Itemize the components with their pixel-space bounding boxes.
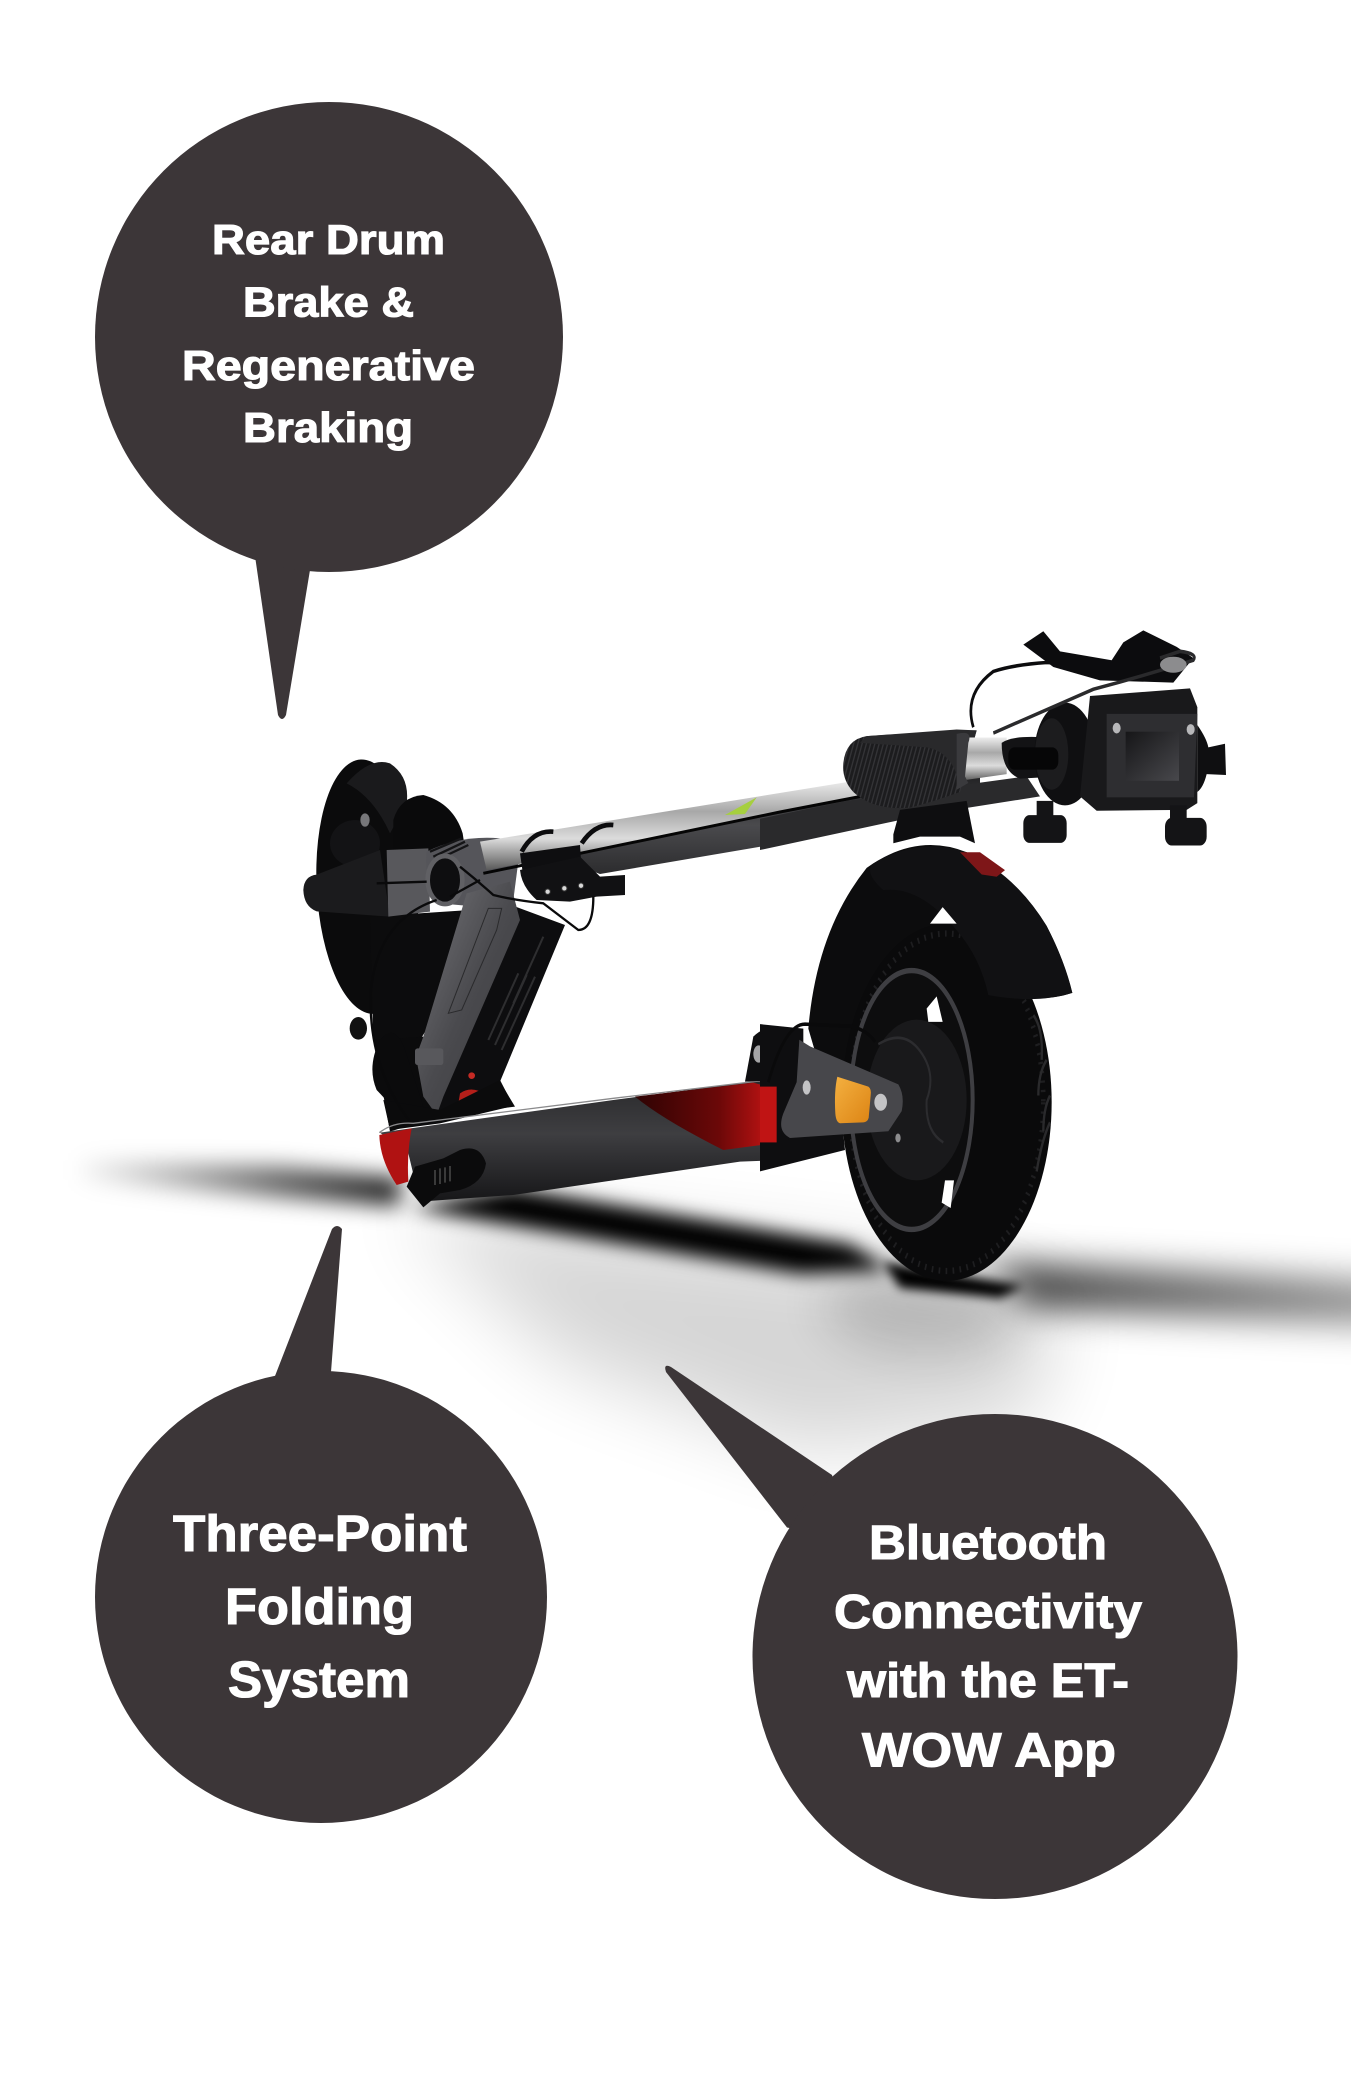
neck grey panel bbox=[416, 882, 520, 1115]
black foot bbox=[383, 1080, 513, 1130]
callout text bbox=[173, 1505, 467, 1708]
chrome cable bbox=[993, 651, 1194, 733]
callout text: with the ET- bbox=[846, 1655, 1129, 1708]
callout: rear drum brake bbox=[95, 102, 563, 719]
neck black side bbox=[423, 903, 565, 1117]
ground shadows bbox=[80, 1160, 1351, 1450]
tyre tread grooves bbox=[850, 933, 1043, 1271]
taillight bbox=[635, 1083, 774, 1150]
callout text: Bluetooth bbox=[869, 1517, 1107, 1570]
callout text: Rear Drum bbox=[212, 216, 445, 263]
bubble tail bbox=[665, 1366, 850, 1540]
fender gap bbox=[930, 907, 957, 924]
silver collar bbox=[960, 738, 1007, 781]
rear cable bbox=[768, 1024, 875, 1082]
fold hinge bbox=[415, 1048, 443, 1065]
lever stalk left bbox=[1037, 801, 1053, 819]
clamp rings bbox=[522, 825, 613, 852]
deck folding latch bbox=[407, 1148, 486, 1207]
collar ridges bbox=[430, 838, 468, 860]
right bar end bbox=[1197, 725, 1226, 792]
inner hub bbox=[1035, 718, 1068, 790]
rear-left reflector bbox=[379, 1128, 412, 1185]
callout: bluetooth connectivity bbox=[665, 1366, 1238, 1899]
scooter bbox=[303, 630, 1226, 1281]
callout text: Three-Point bbox=[173, 1505, 467, 1562]
tyre side grooves bbox=[1033, 1015, 1050, 1171]
lower lever left bbox=[1023, 815, 1067, 843]
callout text: WOW App bbox=[862, 1724, 1116, 1778]
display housing bbox=[1080, 688, 1197, 811]
display screws bbox=[1113, 723, 1195, 735]
taillight end bbox=[760, 1087, 777, 1142]
bar end inner bbox=[1008, 747, 1058, 770]
rear tyre bbox=[842, 924, 1052, 1281]
bracket bolts bbox=[545, 883, 584, 894]
wheel hub bbox=[867, 1020, 967, 1180]
rear pivot bbox=[745, 1026, 783, 1082]
neck ribs bbox=[488, 937, 543, 1050]
front hub bbox=[330, 820, 380, 867]
chrome brake clamp bbox=[1160, 657, 1187, 673]
display screen bbox=[1126, 732, 1179, 781]
deck body bbox=[380, 1079, 780, 1202]
hub bolt bbox=[360, 813, 370, 827]
grip smooth top bbox=[860, 729, 977, 788]
lever stalk right bbox=[1170, 805, 1187, 821]
arm bolts bbox=[803, 1080, 887, 1111]
tube dividing line bbox=[483, 794, 873, 873]
red pin bbox=[468, 1072, 475, 1079]
callout text: Regenerative bbox=[182, 342, 475, 389]
pivot backing bbox=[760, 1024, 803, 1142]
callout text: Brake & bbox=[243, 278, 414, 326]
front fender top bbox=[393, 795, 467, 860]
latch spring bbox=[435, 1166, 450, 1185]
front tyre tread highlight bbox=[347, 762, 407, 833]
collar bbox=[426, 838, 520, 907]
fold base fill bbox=[373, 1037, 447, 1132]
cables bbox=[371, 867, 593, 1122]
green logo bbox=[725, 797, 757, 815]
callout text: Folding bbox=[225, 1578, 414, 1635]
clamp band bbox=[520, 845, 582, 877]
grip end bbox=[957, 733, 969, 790]
hub bolt bbox=[895, 1133, 901, 1142]
lever bbox=[372, 1033, 423, 1122]
callout text: Braking bbox=[243, 404, 413, 451]
fender red light bbox=[960, 852, 1005, 877]
handlebar grip bbox=[843, 730, 977, 808]
callout: three-point folding bbox=[95, 1226, 547, 1823]
rim bbox=[851, 971, 973, 1229]
red knob bbox=[457, 1090, 487, 1113]
neck logo outline bbox=[448, 908, 502, 1013]
hub seam bbox=[878, 1038, 943, 1142]
rear wheel and handlebar section bbox=[760, 630, 1226, 1281]
bubble tail bbox=[255, 500, 310, 719]
deck top edge bbox=[379, 1079, 773, 1133]
fender front shell bbox=[870, 846, 1072, 999]
front fender lower bbox=[370, 910, 470, 1040]
bar end cap bbox=[1002, 737, 1060, 779]
orange reflector bbox=[835, 1077, 871, 1123]
motor hub bbox=[1034, 703, 1096, 805]
rim opening bottom bbox=[942, 1180, 954, 1208]
bubble circle bbox=[752, 1414, 1238, 1899]
deck rear bbox=[760, 1133, 845, 1171]
callout text bbox=[182, 216, 475, 451]
top levers bbox=[1023, 630, 1193, 683]
handlebar tube continuation bbox=[760, 776, 1040, 850]
callout text bbox=[834, 1517, 1142, 1778]
grey block bbox=[387, 848, 430, 917]
bubble tail bbox=[275, 1226, 342, 1420]
callout text: System bbox=[228, 1651, 410, 1708]
lower lever right bbox=[1165, 818, 1207, 846]
stub bbox=[350, 1017, 367, 1040]
brake cable bbox=[971, 663, 1113, 727]
rear fender rear bbox=[808, 845, 1072, 1091]
fender mount bbox=[893, 801, 975, 843]
front wheel and fold section bbox=[303, 757, 980, 1207]
clamp eye bbox=[428, 856, 462, 904]
lower bracket bbox=[520, 857, 625, 902]
bubble circle bbox=[95, 102, 563, 572]
bubble circle bbox=[95, 1371, 547, 1823]
callout text: Connectivity bbox=[834, 1586, 1142, 1639]
pivot bolt bbox=[753, 1045, 764, 1063]
tube silver bbox=[480, 780, 860, 870]
tube dark underside bbox=[573, 777, 980, 874]
display panel bbox=[1107, 714, 1197, 797]
axle housing bbox=[303, 850, 390, 917]
rim opening top bbox=[927, 996, 943, 1022]
swing arm bbox=[781, 1040, 903, 1138]
front tyre bbox=[310, 757, 425, 1016]
